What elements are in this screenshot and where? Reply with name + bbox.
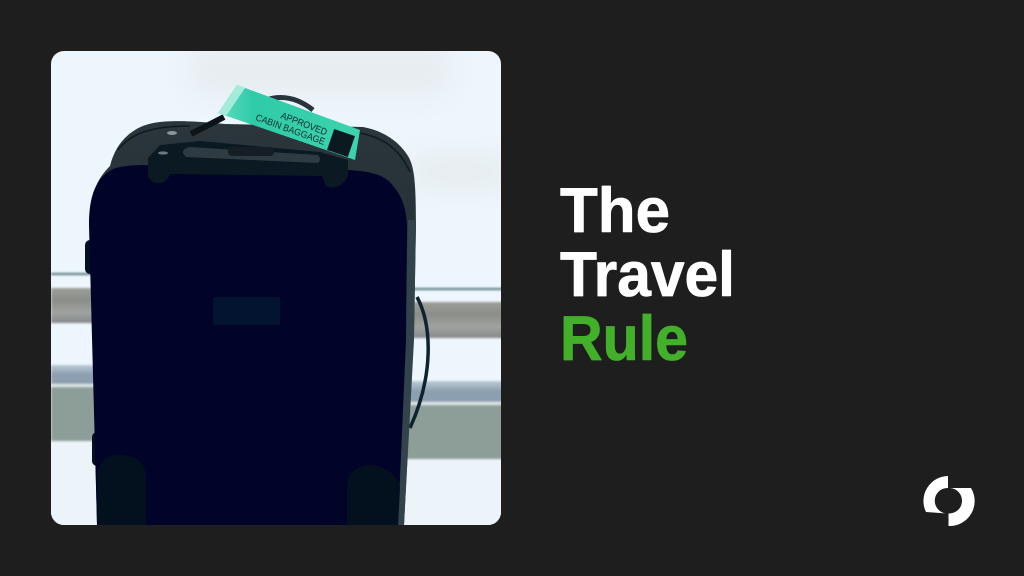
front patch — [213, 297, 280, 325]
window backdrop — [51, 45, 510, 525]
shell seam — [118, 126, 410, 172]
left bump — [85, 240, 90, 274]
title line: Travel: Travel — [560, 240, 735, 310]
title — [560, 176, 735, 374]
title line: The: The — [560, 176, 670, 246]
photo: cabin suitcase with approved baggage tag — [51, 45, 510, 525]
right wheel housing — [347, 465, 400, 525]
tag logo square — [327, 129, 355, 157]
left wheel housing — [97, 455, 146, 525]
suitcase front panel — [89, 165, 407, 525]
suitcase side stripe — [398, 220, 416, 525]
baggage tag: CABIN BAGGAGE — [254, 112, 326, 148]
tag text: APPROVED — [279, 111, 329, 138]
baggage tag — [218, 85, 360, 160]
rivets — [167, 131, 177, 135]
handle plate — [148, 141, 348, 188]
suitcase outer shell — [90, 121, 416, 525]
tag strap — [191, 117, 224, 134]
handle grip — [183, 147, 320, 163]
title line: Rule: Rule — [560, 304, 688, 374]
icon: logo mark — [923, 476, 975, 526]
window frame right — [405, 288, 505, 459]
slide canvas — [51, 51, 975, 526]
window frame left — [51, 272, 94, 442]
rear handle — [266, 98, 313, 110]
side strap — [410, 297, 428, 428]
